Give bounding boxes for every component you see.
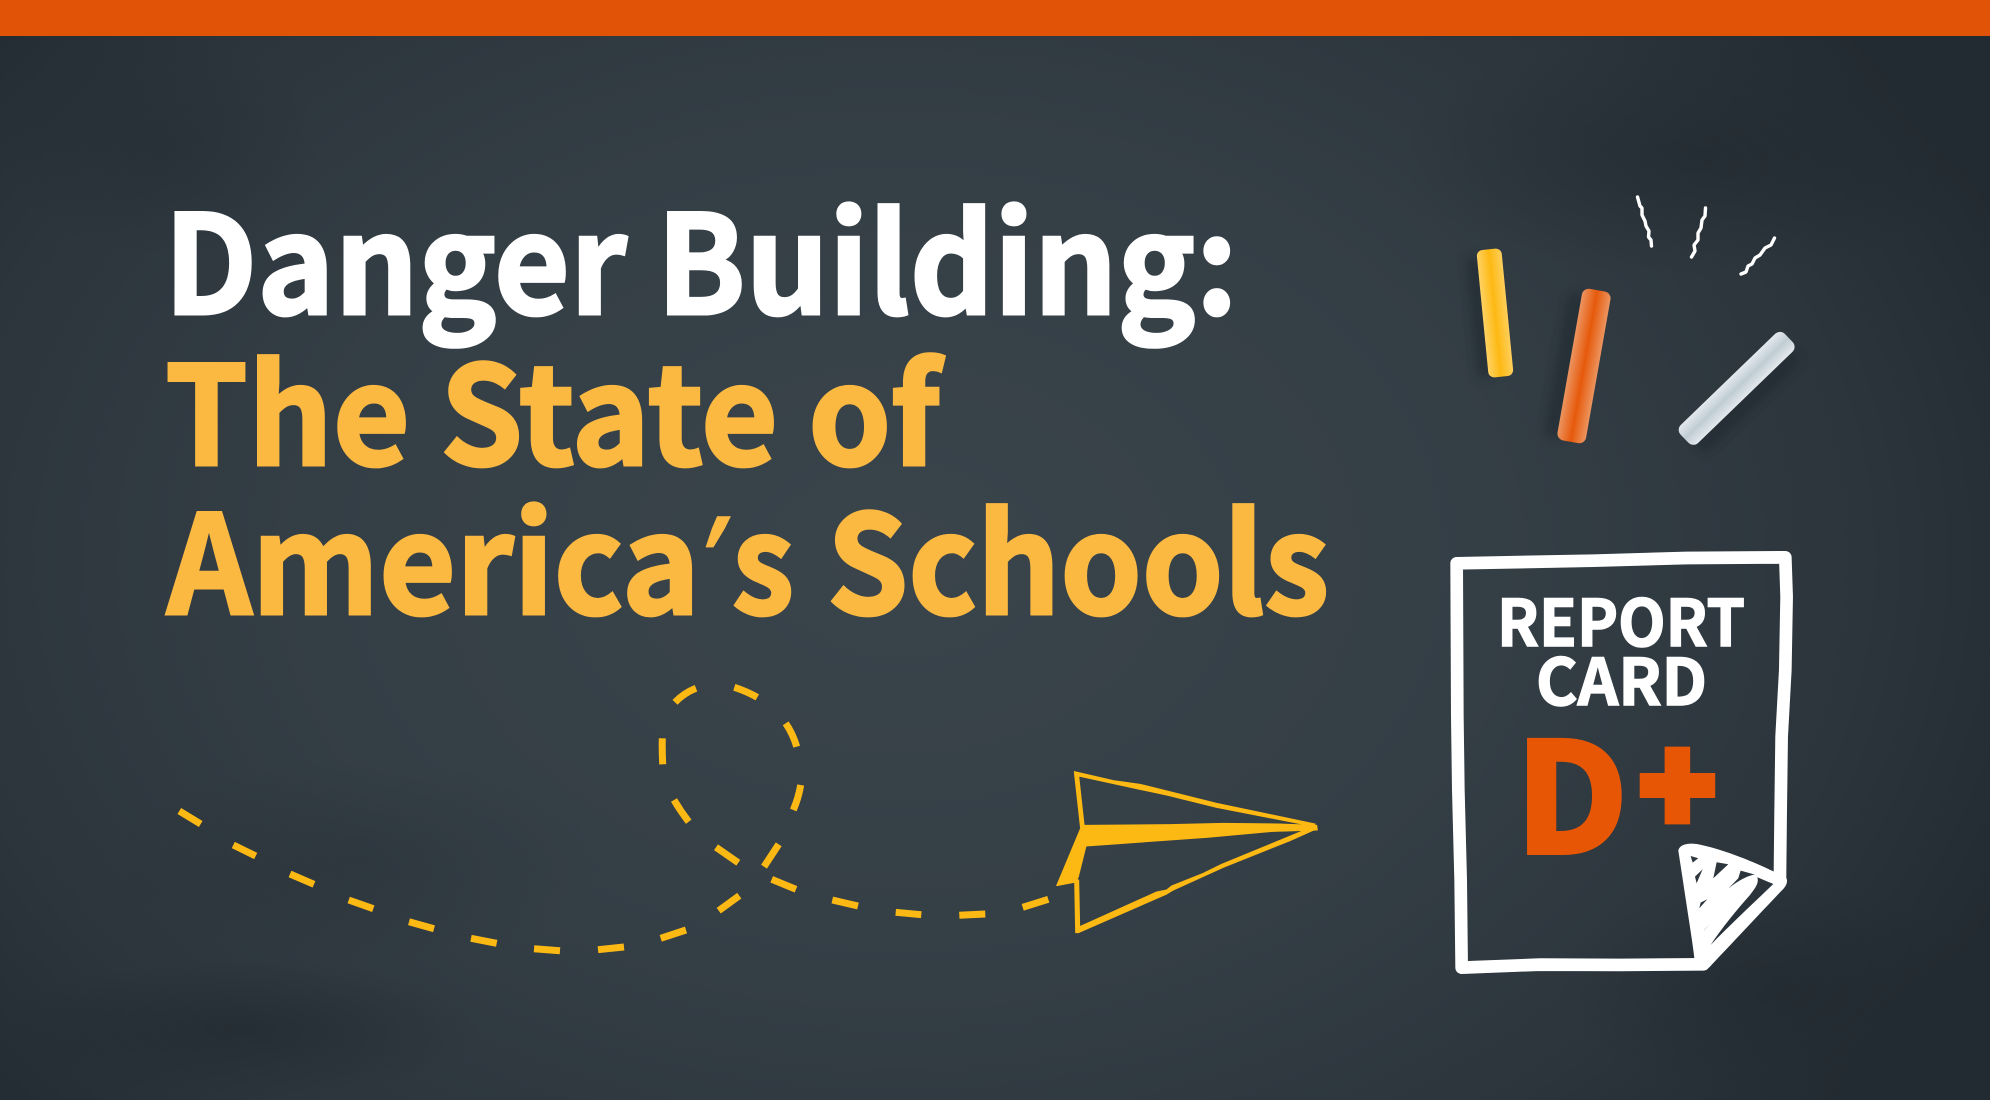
report card heading: CARD: CARD [1536,632,1707,724]
chalk: orange [1543,285,1612,444]
dashed flight path [179,687,1048,951]
grade: D+ [1516,679,1714,896]
page curl [1678,844,1787,969]
report card sheet outline [1457,557,1787,969]
chalk: white [1676,329,1807,457]
report card [1457,557,1787,969]
icon: paper airplane [1057,772,1317,933]
title line: America's Schools: ' [668,484,753,608]
title line: The State of: The State of [165,307,945,505]
orange top bar [0,0,1990,36]
title line: America's Schools: America [166,456,700,654]
title line: America's Schools: Schools [827,456,1329,654]
chalk pieces [1465,248,1807,457]
report card heading: REPORT: REPORT [1497,573,1745,665]
chalk impact marks [1638,197,1774,274]
chalk: yellow [1465,248,1514,379]
title line: America's Schools [166,456,1329,654]
grade: D+: D [1516,679,1627,896]
title line: Danger Building: Danger Building: [164,156,1238,354]
title [164,156,1329,654]
title line: America's Schools: s [732,456,794,654]
grade: D+: + [1641,688,1714,868]
